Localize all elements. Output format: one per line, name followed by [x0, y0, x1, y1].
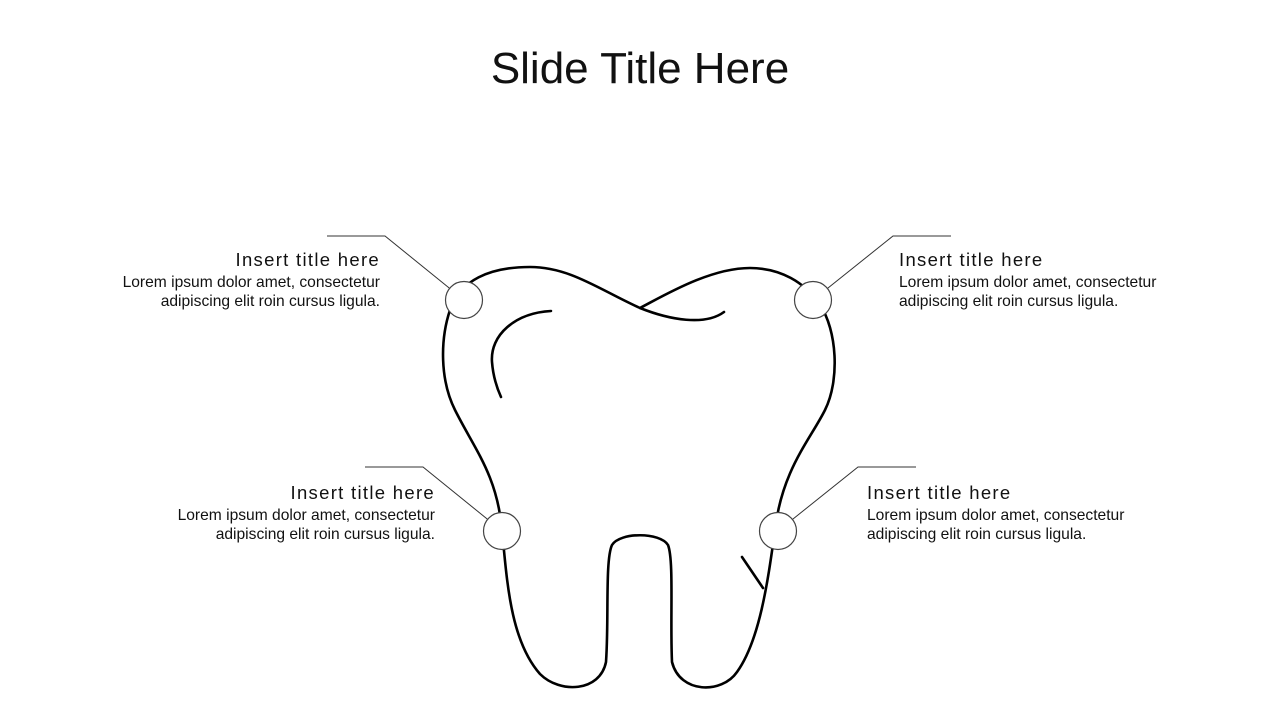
- text block: bottom left: Insert title here: [291, 482, 435, 503]
- text block: top right: adipiscing elit roin cursus ligula.: [899, 293, 1118, 310]
- text block: top left: Lorem ipsum dolor amet, consectetur: [123, 274, 380, 291]
- callout circles: [446, 282, 832, 550]
- text block: top left: [123, 249, 380, 310]
- text block: top left: adipiscing elit roin cursus ligula.: [161, 293, 380, 310]
- text block: top left: Insert title here: [236, 249, 380, 270]
- text block: bottom right: Lorem ipsum dolor amet, consectetur: [867, 507, 1124, 524]
- text block: bottom right: Insert title here: [867, 482, 1011, 503]
- title: Slide Title Here: [491, 44, 789, 93]
- text block: bottom right: [867, 482, 1124, 543]
- text block: bottom right: adipiscing elit roin cursus ligula.: [867, 526, 1086, 543]
- tooth outline: [443, 267, 835, 687]
- leader lines: [327, 236, 951, 531]
- text block: bottom left: [178, 482, 435, 543]
- text block: top right: Lorem ipsum dolor amet, consectetur: [899, 274, 1156, 291]
- text block: bottom left: adipiscing elit roin cursus ligula.: [216, 526, 435, 543]
- text block: top right: [899, 249, 1156, 310]
- text block: bottom left: Lorem ipsum dolor amet, consectetur: [178, 507, 435, 524]
- text block: top right: Insert title here: [899, 249, 1043, 270]
